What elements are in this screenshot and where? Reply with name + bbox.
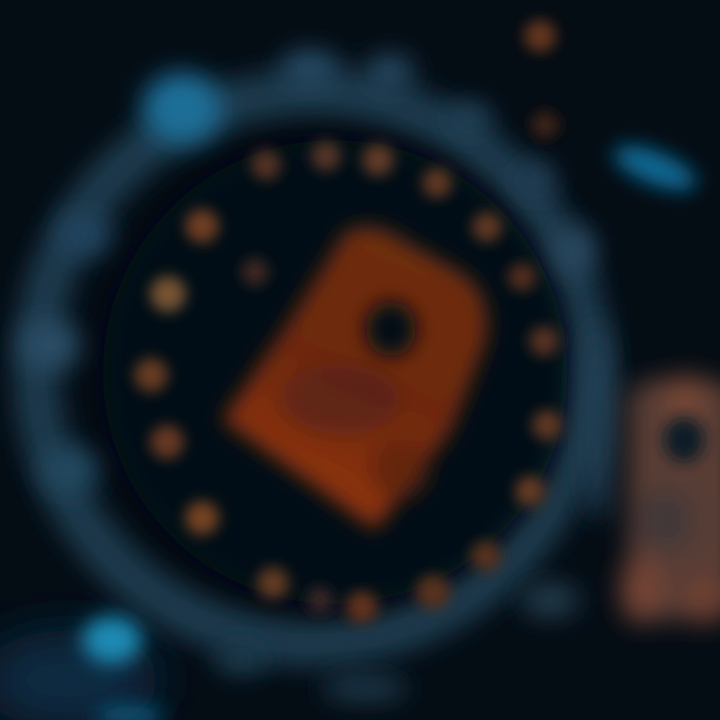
- padlock dark centre: [280, 364, 400, 436]
- second padlock keyhole: [664, 418, 704, 462]
- padlock keyhole: [366, 302, 416, 356]
- padlock body: [222, 226, 488, 530]
- ring: outer blue-grey band: [36, 92, 588, 644]
- blue blob: bottom edge: [96, 706, 164, 720]
- ring highlights: [20, 50, 614, 702]
- bright blue blob: bottom left: [82, 616, 142, 664]
- background glow: bottom left: [0, 630, 160, 720]
- ring: inner dark disc: [103, 140, 567, 604]
- orange dots around the ring: [134, 20, 562, 623]
- second padlock at right edge: [620, 375, 720, 624]
- bright blue blob: top right: [608, 137, 702, 199]
- padlock lower dark patch: [370, 440, 430, 500]
- bright blue blob: top left: [142, 72, 222, 144]
